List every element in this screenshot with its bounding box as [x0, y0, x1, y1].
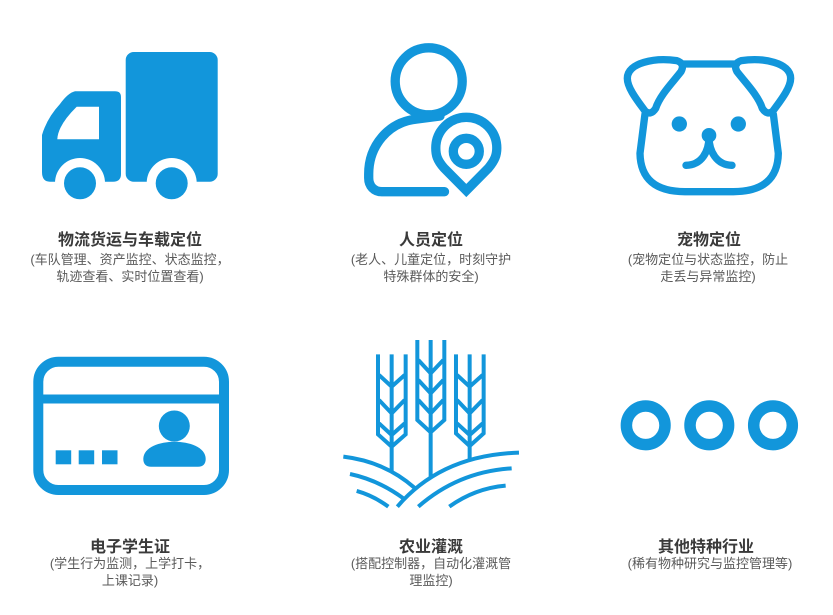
text block: electronic student card — [50, 538, 210, 588]
text block: pet positioning: 宠物定位 — [677, 232, 741, 249]
text block: agricultural irrigation — [351, 538, 511, 588]
text block: electronic student card: 上课记录) — [102, 573, 158, 588]
text block: truck positioning: 轨迹查看、实时位置查看) — [56, 269, 204, 284]
text block: electronic student card: 电子学生证 — [90, 539, 170, 556]
icon: dog face — [627, 60, 791, 192]
icon: student ID card — [38, 362, 224, 490]
text block: agricultural irrigation: 农业灌溉 — [399, 539, 463, 556]
text block: truck positioning: 物流货运与车载定位 — [58, 232, 202, 249]
icon: wheat and fields — [343, 340, 519, 507]
text block: electronic student card: (学生行为监测，上学打卡， — [50, 556, 210, 571]
icon: truck — [30, 52, 230, 208]
text block: pet positioning: (宠物定位与状态监控，防止 — [628, 252, 788, 267]
text block: agricultural irrigation: 理监控) — [409, 573, 453, 588]
text block: personnel positioning: (老人、儿童定位，时刻守护 — [351, 252, 511, 267]
icon: person with location pin — [369, 48, 497, 192]
text block: truck positioning — [30, 231, 230, 284]
text block: other industries: (稀有物种研究与监控管理等) — [628, 556, 792, 571]
text block: agricultural irrigation: (搭配控制器，自动化灌溉管 — [351, 556, 511, 571]
text block: personnel positioning — [351, 231, 511, 284]
text block: other industries: 其他特种行业 — [658, 539, 754, 556]
text block: other industries — [628, 538, 792, 571]
icon: three dots — [626, 406, 792, 445]
text block: pet positioning: 走丢与异常监控) — [660, 269, 756, 284]
text block: truck positioning: (车队管理、资产监控、状态监控， — [30, 252, 230, 267]
text block: personnel positioning: 特殊群体的安全) — [383, 269, 479, 284]
text block: pet positioning — [628, 231, 788, 284]
text block: personnel positioning: 人员定位 — [399, 232, 463, 249]
